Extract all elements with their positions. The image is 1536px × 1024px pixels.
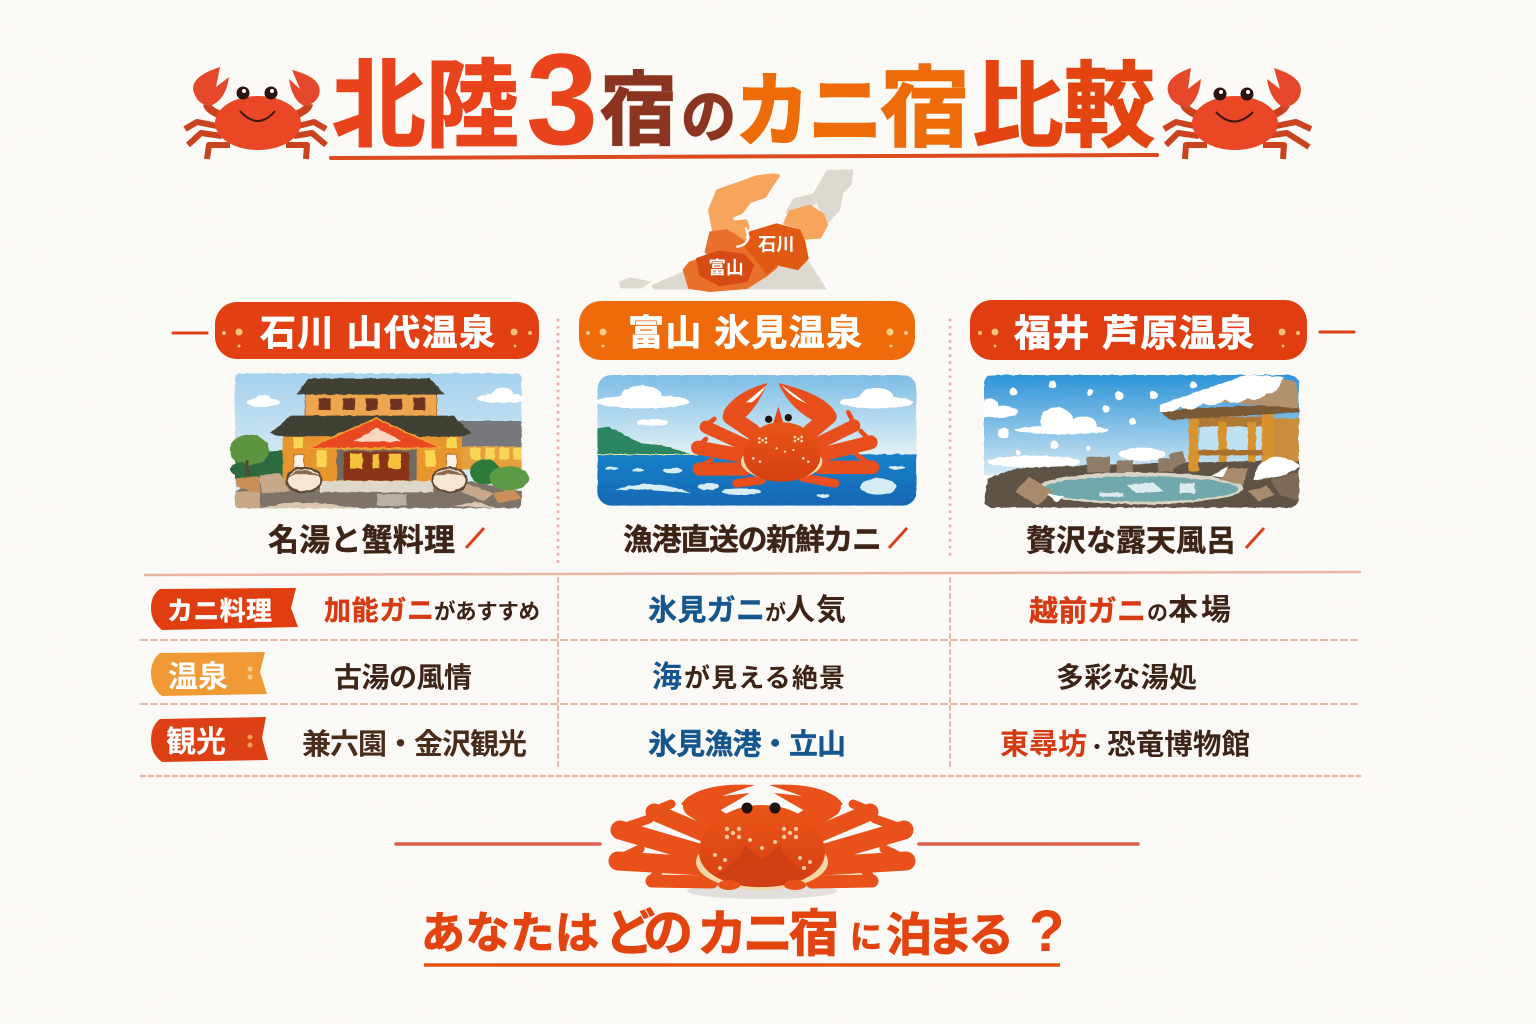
tag: カニ料理: カニ料理 [167, 596, 272, 626]
closing call to action: カニ宿 [697, 906, 839, 962]
title: 宿 [600, 66, 677, 155]
title: 宿 [880, 59, 970, 158]
panel: Ishikawa Yamashiro Onsen [215, 302, 539, 558]
decorative side dash right [1320, 330, 1354, 334]
title: カニ [736, 67, 882, 156]
closing call to action: どの [605, 905, 693, 961]
Fukui crab text: の [1147, 602, 1168, 625]
Toyama subtitle: 漁港直送の新鮮カニ [623, 524, 882, 557]
row: hot spring [151, 652, 1197, 696]
Toyama sightseeing text: 氷見漁港・立山 [648, 728, 846, 761]
title: の [681, 85, 736, 150]
row: sightseeing [151, 717, 1250, 762]
map of Hokuriku [619, 169, 853, 291]
tag: 観光 [151, 717, 268, 762]
closing call to action: 泊まる [886, 909, 1014, 961]
Ishikawa crab text: 加能ガニ [324, 596, 434, 626]
title: 比較 [972, 55, 1155, 159]
Toyama heading banner [579, 301, 915, 360]
Ishikawa spring text: 古湯の風情 [334, 662, 472, 693]
closing call to action: に [850, 919, 882, 955]
Toyama crab text: 氷見ガニ [648, 594, 765, 627]
icon: large snow crab [617, 785, 907, 899]
closing call to action [421, 899, 1064, 965]
Toyama heading banner: 富山 氷見温泉 [628, 312, 862, 353]
Ishikawa crab text [324, 596, 540, 626]
decorative side dash left [173, 332, 207, 334]
map of Hokuriku: 富山 [708, 258, 744, 278]
Ishikawa heading banner [215, 302, 539, 359]
Fukui subtitle: 贅沢な露天風呂 [1026, 525, 1236, 558]
tag: 温泉: 温泉 [168, 661, 228, 694]
illustration: ryokan building [229, 373, 529, 508]
Fukui crab text: 越前ガニ [1029, 595, 1146, 628]
icon: left cartoon crab [185, 67, 326, 159]
Fukui spring text: 多彩な湯処 [1056, 662, 1197, 693]
Toyama spring text: が見える絶景 [684, 663, 845, 693]
row: crab cuisine [151, 588, 1231, 630]
Ishikawa sightseeing text: 兼六園・金沢観光 [302, 728, 527, 761]
closing call to action: あなたは [421, 909, 599, 958]
illustration: snow crab on the sea [597, 375, 917, 506]
Toyama crab text [648, 594, 846, 627]
icon: right cartoon crab [1164, 68, 1311, 159]
panel: Toyama Himi Onsen [579, 301, 917, 557]
title [331, 26, 1157, 172]
Ishikawa heading banner: 石川 山代温泉 [260, 312, 495, 353]
panel: Fukui Awara Onsen [970, 300, 1307, 558]
illustration: open-air bath in snow [975, 375, 1299, 508]
Fukui heading banner: 福井 芦原温泉 [1014, 313, 1254, 354]
Toyama spring text: 海 [652, 661, 682, 694]
title: 3 [526, 26, 598, 172]
Ishikawa subtitle: 名湯と蟹料理 [268, 523, 455, 558]
Fukui sightseeing text: 東尋坊 [1000, 728, 1087, 761]
tag: カニ料理 [151, 588, 298, 630]
Fukui sightseeing text: ・ [1087, 737, 1107, 759]
Toyama crab text: が [765, 601, 786, 625]
side lines beside bottom crab [396, 842, 1138, 846]
Ishikawa crab text: があすすめ [434, 599, 540, 624]
map of Hokuriku: 石川 [758, 235, 795, 255]
tag: 温泉 [151, 652, 267, 696]
Fukui sightseeing text [1000, 728, 1250, 761]
Toyama crab text: 人気 [785, 594, 846, 627]
tag: 観光: 観光 [166, 726, 226, 759]
Fukui sightseeing text: 恐竜博物館 [1107, 729, 1250, 761]
title: 北陸 [332, 53, 519, 160]
Fukui heading banner [970, 300, 1307, 360]
Fukui crab text [1029, 594, 1231, 628]
closing call to action: ? [1029, 899, 1064, 964]
Fukui crab text: 本場 [1168, 594, 1231, 627]
